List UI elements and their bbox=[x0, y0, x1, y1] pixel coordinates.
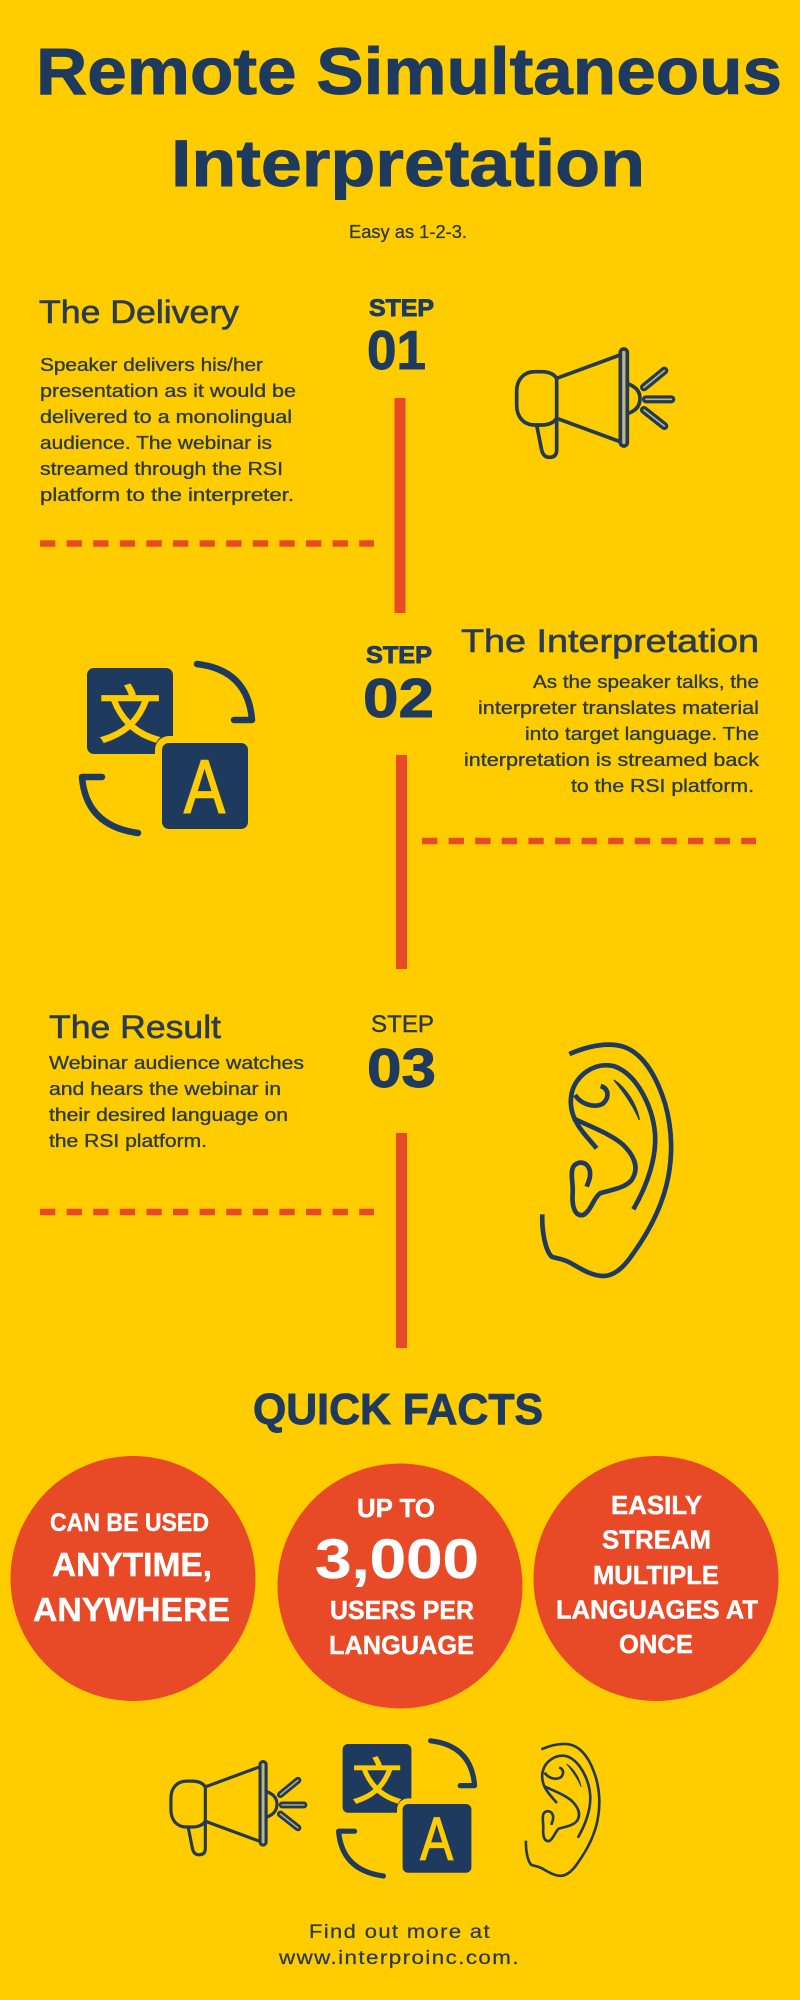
text block: interpretation description: As the speaker talks, the bbox=[533, 672, 759, 692]
step 2 label: STEP bbox=[366, 642, 432, 669]
fact circle 2 bbox=[278, 1464, 522, 1708]
footer text: www.interproinc.com. bbox=[278, 1948, 520, 1969]
text block: interpretation description: interpretation is streamed back bbox=[464, 750, 760, 770]
panel: step 2 text bbox=[461, 623, 760, 796]
dashed line 1 bbox=[40, 540, 374, 547]
heading: quick facts: QUICK FACTS bbox=[253, 1385, 543, 1434]
text block: delivery description: delivered to a monolingual bbox=[40, 407, 292, 427]
fact circle 3: ONCE bbox=[619, 1629, 693, 1659]
fact circle 3: LANGUAGES AT bbox=[556, 1594, 758, 1624]
fact circle 3: MULTIPLE bbox=[593, 1560, 719, 1590]
text block: result description: Webinar audience watches bbox=[49, 1053, 304, 1073]
text block: result description bbox=[49, 1053, 304, 1151]
footer text: Find out more at bbox=[309, 1922, 491, 1943]
icon: ear bbox=[542, 1045, 671, 1276]
step 1 label: 01 bbox=[367, 319, 426, 381]
text block: delivery description: presentation as it would be bbox=[40, 381, 296, 401]
fact circle 1: ANYWHERE bbox=[33, 1591, 230, 1628]
text block: interpretation description: interpreter translates material bbox=[478, 698, 759, 718]
text block: interpretation description: into target language. The bbox=[525, 724, 759, 744]
icon: translate bbox=[82, 664, 255, 836]
vertical bar 3 bbox=[396, 1133, 407, 1348]
fact circle 1 bbox=[10, 1456, 256, 1701]
heading: The Interpretation: The Interpretation bbox=[461, 623, 759, 659]
text block: interpretation description bbox=[464, 672, 760, 796]
text block: delivery description: platform to the interpreter. bbox=[40, 485, 294, 505]
dashed line 2 bbox=[422, 838, 756, 844]
icon: small ear bbox=[526, 1744, 599, 1876]
text block: result description: their desired language on bbox=[49, 1105, 288, 1125]
step 2 label bbox=[363, 642, 434, 729]
step 3 label bbox=[367, 1011, 436, 1099]
fact circle 1: ANYTIME, bbox=[52, 1546, 212, 1583]
icon: megaphone bbox=[517, 349, 671, 457]
dashed line 3 bbox=[40, 1209, 374, 1215]
icon: small translate: 文 bbox=[352, 1742, 402, 1814]
subtitle: Easy as 1-2-3. bbox=[349, 222, 467, 242]
title bbox=[36, 34, 782, 200]
text block: delivery description bbox=[40, 355, 296, 505]
step 1 label bbox=[367, 295, 434, 381]
heading: The Result: The Result bbox=[49, 1009, 221, 1045]
step 2 label: 02 bbox=[363, 667, 434, 729]
text block: delivery description: audience. The webinar is bbox=[40, 433, 272, 453]
step 1 label: STEP bbox=[369, 295, 434, 322]
fact circle 2: 3,000 bbox=[315, 1527, 479, 1590]
text block: delivery description: streamed through the RSI bbox=[40, 459, 283, 479]
fact circle 2: LANGUAGE bbox=[329, 1630, 474, 1660]
fact circle 2: USERS PER bbox=[330, 1595, 474, 1625]
panel: step 3 text bbox=[49, 1009, 304, 1151]
icon: small translate bbox=[339, 1741, 477, 1878]
text block: result description: the RSI platform. bbox=[49, 1131, 207, 1151]
icon: small translate: A bbox=[420, 1805, 453, 1873]
text block: delivery description: Speaker delivers his/her bbox=[40, 355, 263, 375]
title: Interpretation bbox=[171, 126, 645, 200]
step 3 label: 03 bbox=[367, 1037, 436, 1099]
vertical bar 2 bbox=[396, 755, 407, 969]
fact circle 3 bbox=[534, 1456, 778, 1701]
text block: result description: and hears the webinar in bbox=[49, 1079, 281, 1099]
text block: interpretation description: to the RSI platform. bbox=[571, 776, 754, 796]
fact circle 3: STREAM bbox=[602, 1524, 711, 1554]
title: Remote Simultaneous bbox=[36, 34, 782, 108]
vertical bar 1 bbox=[394, 398, 406, 613]
panel: step 1 text bbox=[39, 294, 296, 505]
icon: translate: A bbox=[184, 745, 225, 830]
step 3 label: STEP bbox=[371, 1011, 434, 1038]
icon: translate: 文 bbox=[99, 665, 161, 755]
fact circle 3: EASILY bbox=[611, 1490, 702, 1520]
icon: small megaphone bbox=[171, 1762, 304, 1855]
heading: The Delivery: The Delivery bbox=[39, 294, 239, 330]
fact circle 1: CAN BE USED bbox=[50, 1509, 209, 1537]
footer text bbox=[278, 1922, 520, 1969]
fact circle 2: UP TO bbox=[357, 1493, 435, 1523]
